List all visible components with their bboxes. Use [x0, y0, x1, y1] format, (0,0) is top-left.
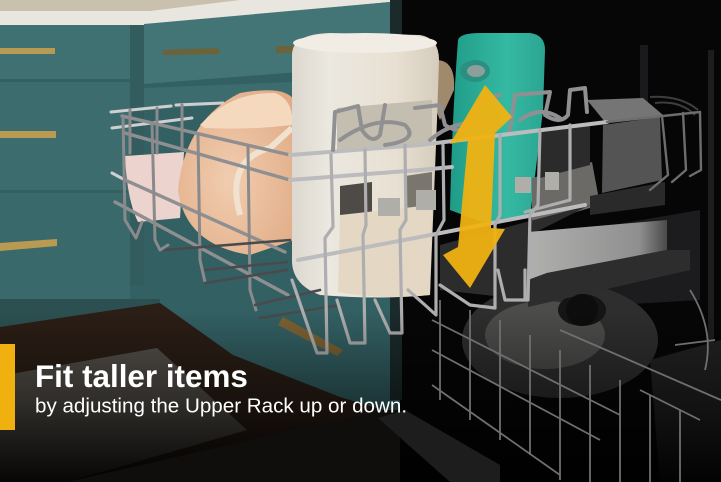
appliance parts — [528, 97, 698, 326]
pink plate — [125, 152, 184, 222]
side verticals — [123, 105, 256, 310]
lower rack wires — [432, 290, 721, 482]
cup holders — [333, 88, 587, 150]
clips — [378, 172, 559, 216]
back rails — [111, 103, 223, 180]
tan dish behind — [432, 60, 454, 120]
background: dishwasher interior — [390, 0, 721, 482]
interior clutter — [532, 162, 600, 225]
wire tangle — [650, 97, 698, 115]
background: floor and lower cabinet — [0, 303, 383, 482]
dispenser grey box — [587, 98, 663, 122]
control knob — [566, 294, 598, 326]
front rails — [290, 122, 607, 260]
accent bar — [0, 344, 15, 430]
peach mug — [178, 90, 294, 255]
upper rack wires — [111, 88, 701, 353]
white cylinder — [292, 33, 439, 298]
yellow double-headed arrow — [443, 85, 512, 288]
subheading: by adjusting the Upper Rack up or down. — [35, 394, 407, 418]
right-hand side rails — [607, 112, 701, 190]
teal bottle — [450, 33, 545, 225]
lower panel — [528, 220, 667, 280]
floor wires — [165, 240, 340, 318]
open door edge — [67, 410, 500, 482]
background: kitchen cabinets — [0, 0, 400, 482]
dishes in upper rack — [125, 33, 600, 300]
side rails — [115, 116, 290, 295]
bottom darkening overlay — [0, 310, 721, 482]
front tines — [292, 125, 570, 353]
heading: Fit taller items — [35, 359, 248, 394]
